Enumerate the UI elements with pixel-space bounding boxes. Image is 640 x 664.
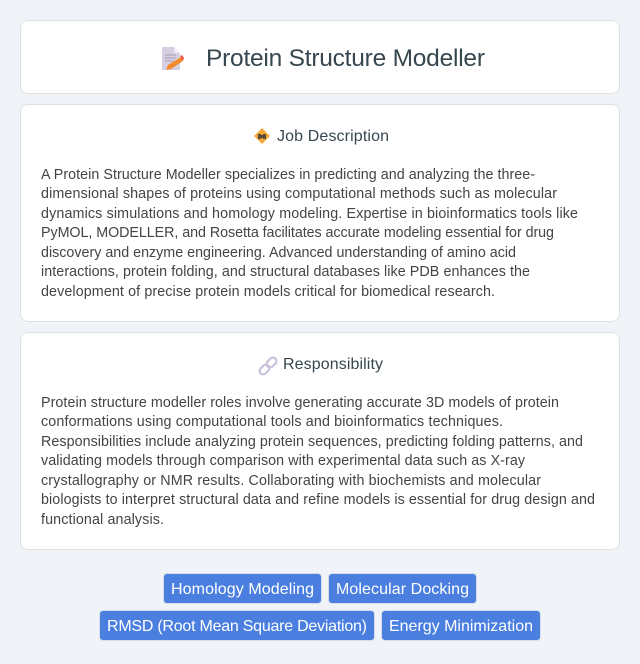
icon: document with pencil bbox=[162, 47, 184, 70]
tag: Homology Modeling bbox=[163, 573, 322, 604]
text block: responsibility bbox=[41, 395, 595, 528]
text block: responsibility: functional analysis. bbox=[41, 512, 164, 528]
text block: job description: interactions, protein folding, and structural databases like PDB enhances the bbox=[41, 264, 530, 280]
text block: responsibility: biologists to interpret structural data and refine models is essential for drug design and bbox=[41, 492, 595, 508]
tag: Energy Minimization bbox=[381, 610, 541, 641]
heading: job description: Job Description bbox=[277, 128, 389, 145]
text block: job description: A Protein Structure Modeller specializes in predicting and analyzing the three- bbox=[41, 167, 535, 183]
heading: responsibility: Responsibility bbox=[283, 356, 383, 373]
tag: Molecular Docking: Molecular Docking bbox=[336, 581, 469, 598]
text block: job description bbox=[41, 167, 578, 300]
tag: RMSD bbox=[99, 610, 375, 641]
panel: job description bbox=[20, 104, 620, 322]
title: Protein Structure Modeller bbox=[206, 45, 485, 72]
text block: responsibility: validating models through comparison with experimental data such as X-ray bbox=[41, 453, 526, 469]
panel: responsibility bbox=[20, 332, 620, 550]
panel: title header bbox=[20, 20, 620, 94]
text block: responsibility: Responsibilities include analyzing protein sequences, predicting folding patterns, and bbox=[41, 434, 583, 450]
text block: job description: discovery and enzyme engineering. Advanced understanding of amino acid bbox=[41, 245, 516, 261]
text block: responsibility: Protein structure modeller roles involve generating accurate 3D models of protein bbox=[41, 395, 559, 411]
tag: RMSD: RMSD (Root Mean Square Deviation) bbox=[107, 618, 367, 635]
icon: puzzle diamond bbox=[254, 128, 270, 144]
text block: job description: PyMOL, MODELLER, and Rosetta facilitates accurate modeling essential for drug bbox=[41, 225, 554, 241]
tag: Molecular Docking bbox=[328, 573, 477, 604]
icon: chain link bbox=[258, 356, 278, 376]
text block: responsibility: crystallography or NMR results. Collaborating with biochemists and molecular bbox=[41, 473, 541, 489]
text block: job description: development of precise protein models critical for biomedical research. bbox=[41, 284, 495, 300]
text block: responsibility: conformations using computational tools and bioinformatics techniques. bbox=[41, 414, 503, 430]
text block: job description: dimensional shapes of proteins using computational methods such as molecular bbox=[41, 186, 557, 202]
text block: job description: dynamics simulations and homology modeling. Expertise in bioinformatics tools like bbox=[41, 206, 578, 222]
tag: Homology Modeling: Homology Modeling bbox=[171, 581, 314, 598]
tag: Energy Minimization: Energy Minimization bbox=[389, 618, 533, 635]
